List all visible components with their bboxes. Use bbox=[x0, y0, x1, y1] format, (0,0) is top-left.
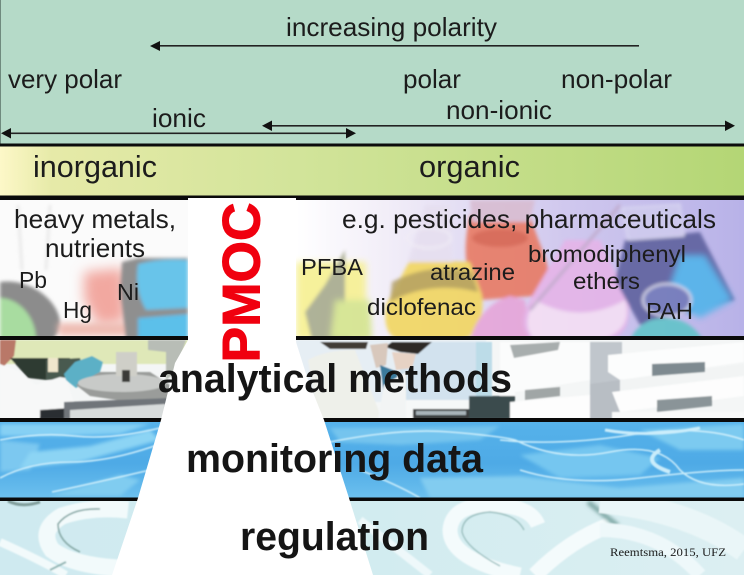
label: bromodiphenyl ethers: bromodiphenyl bbox=[528, 241, 686, 267]
label: atrazine: atrazine bbox=[430, 259, 515, 285]
panel: inorganic substances photo bbox=[0, 200, 188, 342]
label: polar: polar bbox=[403, 64, 461, 94]
label: Ni: Ni bbox=[117, 279, 139, 305]
panel: regulation paragraph symbols photo bbox=[0, 501, 744, 575]
heading: monitoring data: monitoring data bbox=[186, 437, 484, 481]
panel: water photo bbox=[0, 422, 744, 498]
label: bromodiphenyl ethers bbox=[530, 245, 684, 289]
heading: analytical methods: analytical methods bbox=[158, 357, 512, 401]
panel: laboratory photo bbox=[0, 340, 744, 419]
label: non-ionic: non-ionic bbox=[446, 95, 552, 125]
right scene bbox=[296, 340, 486, 402]
label: Pb: Pb bbox=[19, 267, 47, 293]
label: heavy metals, nutrients bbox=[16, 209, 174, 258]
arrow: ionic range bbox=[1, 128, 356, 138]
label: e.g. pesticides, pharmaceuticals: e.g. pesticides, pharmaceuticals bbox=[342, 204, 716, 234]
label: heavy metals, nutrients: heavy metals, bbox=[14, 204, 176, 234]
panel: organic substances photo bbox=[296, 200, 744, 340]
label: PFBA: PFBA bbox=[301, 254, 364, 280]
credit: Reemtsma, 2015, UFZ: Reemtsma, 2015, UFZ bbox=[610, 545, 726, 559]
label: PAH: PAH bbox=[646, 298, 693, 324]
panel: polarity scale bbox=[0, 0, 744, 144]
label: organic: organic bbox=[419, 149, 520, 184]
label: very polar: very polar bbox=[8, 64, 122, 94]
label: ionic: ionic bbox=[152, 103, 206, 133]
label: inorganic: inorganic bbox=[33, 149, 157, 184]
heading: regulation: regulation bbox=[240, 515, 429, 559]
label: Hg: Hg bbox=[63, 297, 92, 323]
label: diclofenac: diclofenac bbox=[367, 294, 476, 320]
title: PMOC: PMOC bbox=[212, 202, 272, 362]
label: non-polar: non-polar bbox=[561, 64, 672, 94]
arrow: non-ionic range bbox=[262, 120, 735, 131]
left scene bbox=[0, 340, 190, 364]
label: heavy metals, nutrients: nutrients bbox=[45, 233, 145, 263]
panel: inorganic and organic band bbox=[0, 146, 744, 196]
label: bromodiphenyl ethers: ethers bbox=[573, 268, 640, 294]
shape: white PMOC funnel bbox=[112, 198, 373, 575]
heading: increasing polarity: increasing polarity bbox=[286, 12, 497, 42]
arrow: increasing polarity bbox=[150, 41, 639, 51]
